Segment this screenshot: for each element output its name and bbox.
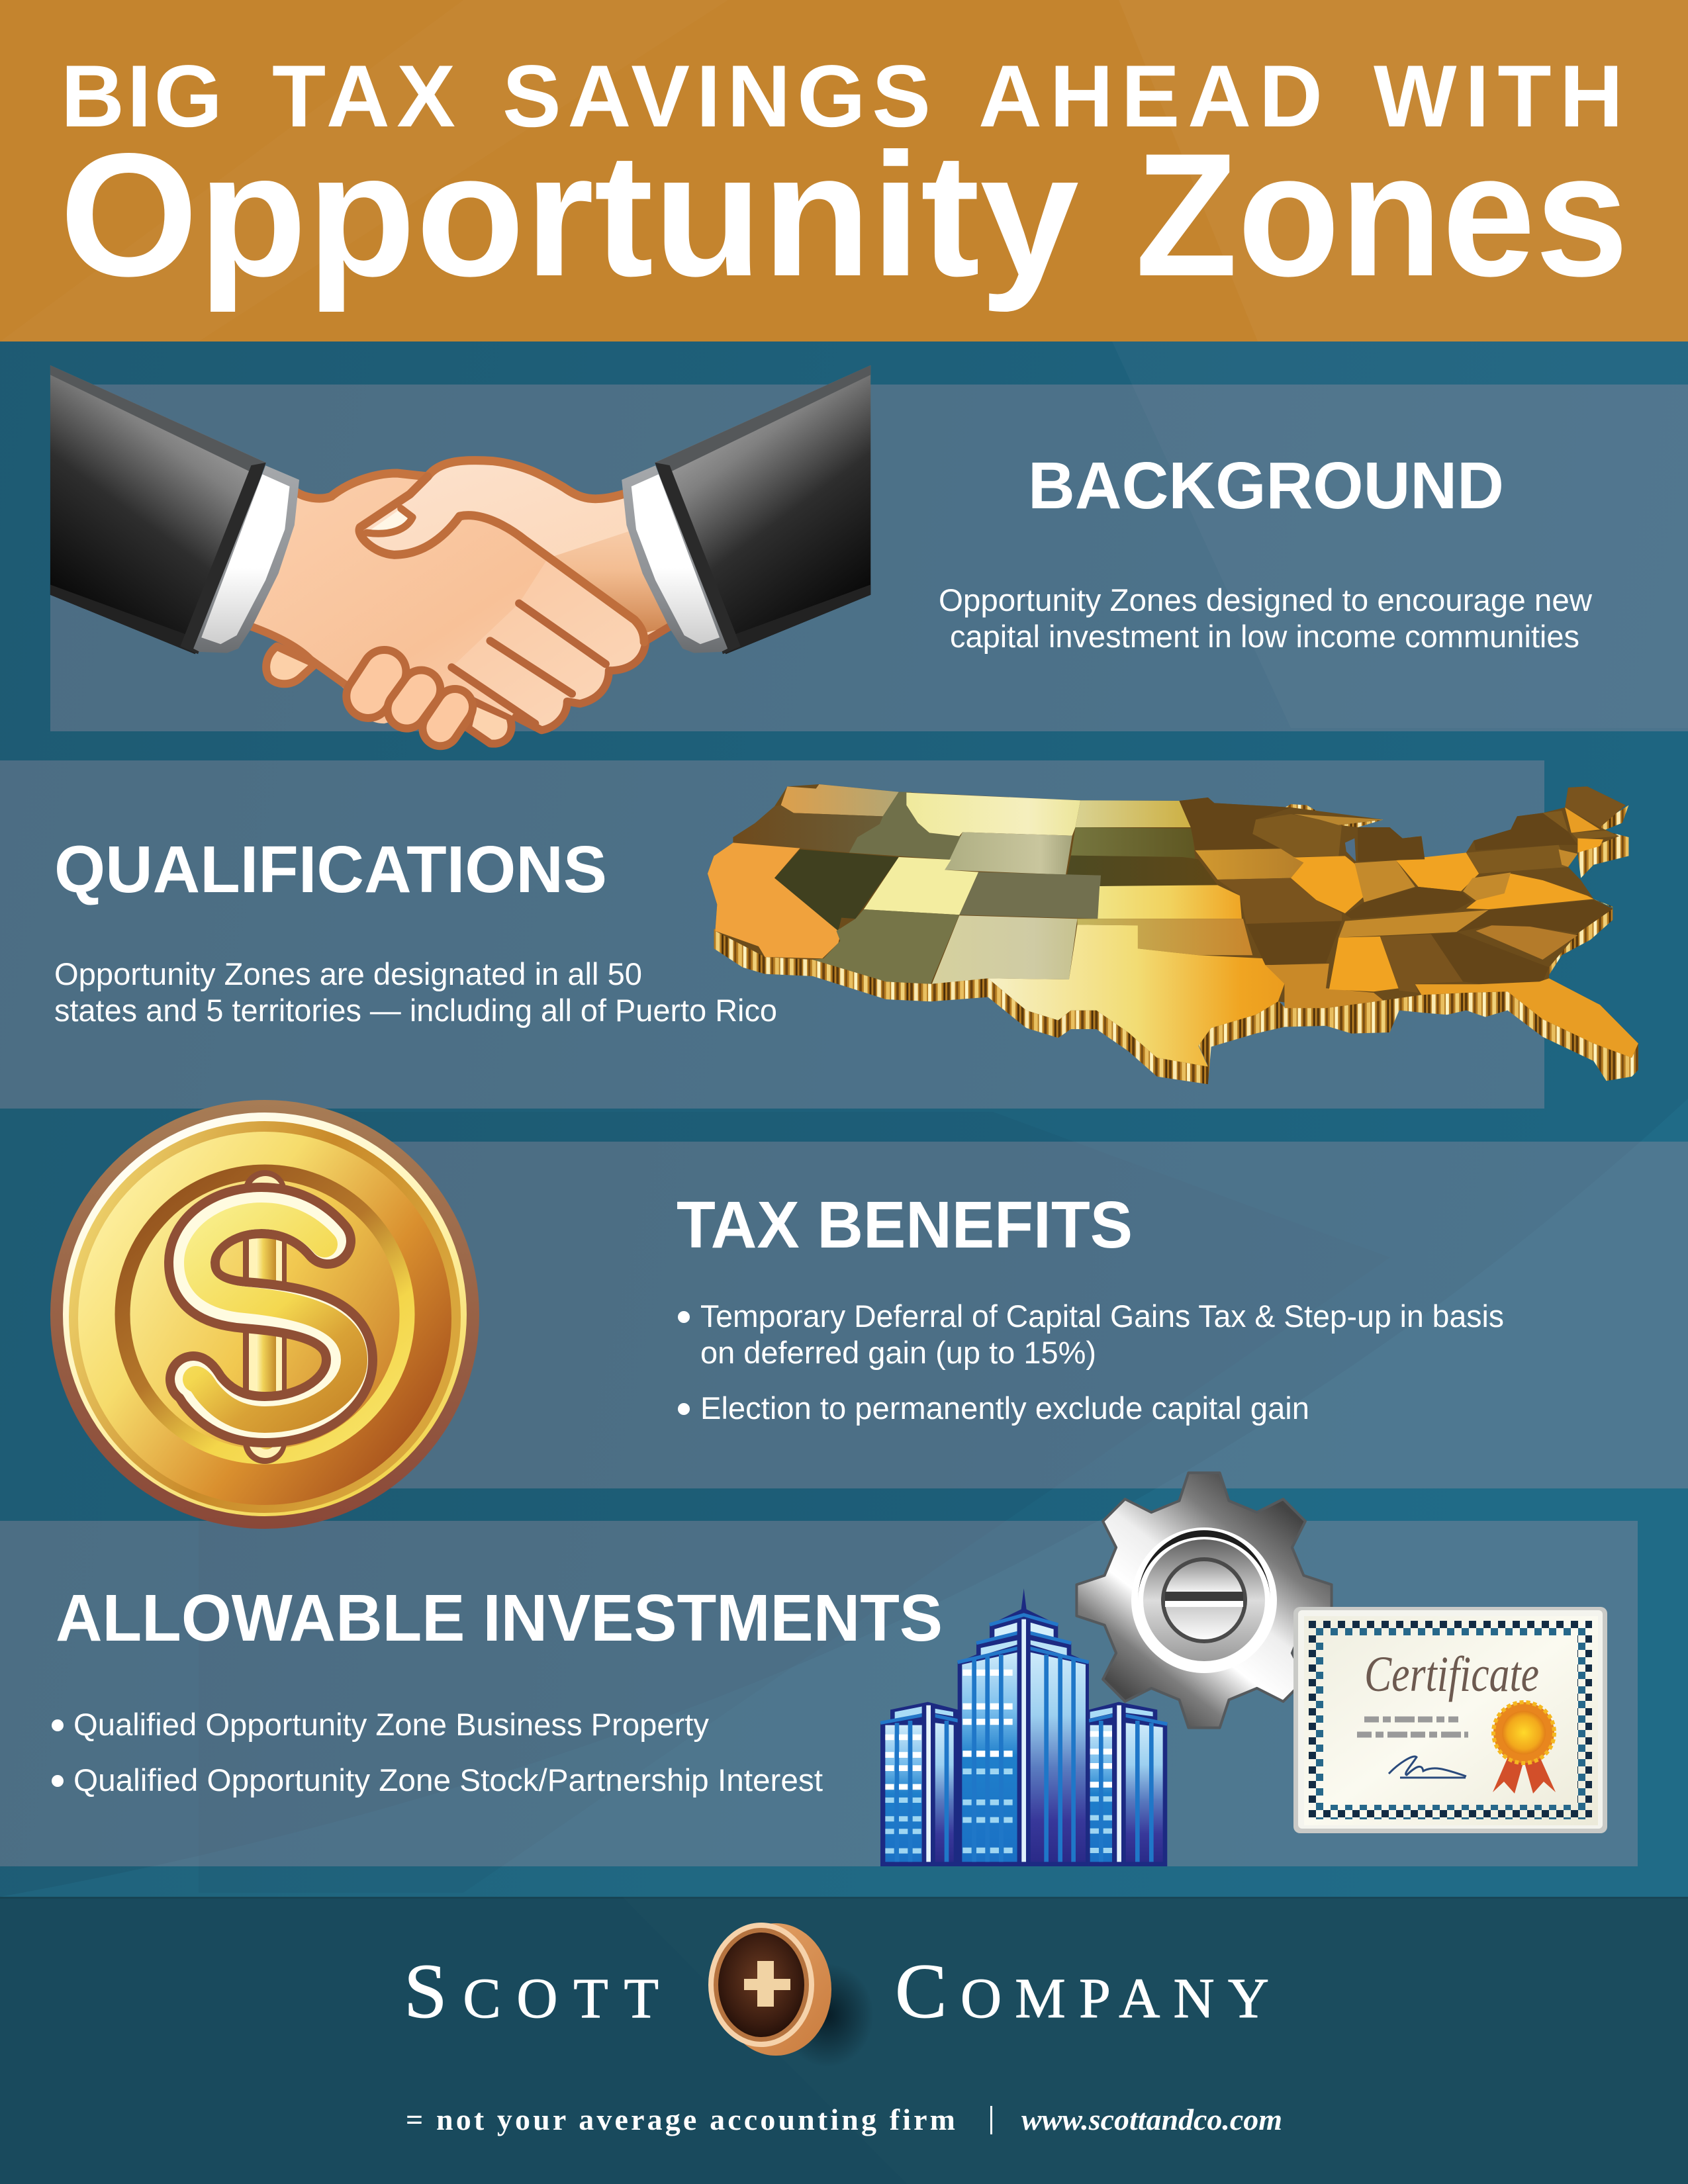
map base silhouette [708, 784, 1638, 1067]
text: background description: capital investment in low income communities [950, 619, 1579, 654]
title line one: WITH [1374, 48, 1623, 146]
footer band [0, 1897, 1688, 2184]
text: qualifications description: states and 5 territories — including all of Puerto Rico [54, 993, 777, 1028]
heading: tax benefits: TAX BENEFITS [677, 1188, 1133, 1262]
map extruded edge [714, 804, 1638, 1084]
bullet: exclusion: Election to permanently exclude capital gain [700, 1390, 1309, 1426]
title line one: AHEAD [978, 48, 1323, 146]
certificate title: Certificate [1364, 1647, 1539, 1702]
icon: silver gear [1076, 1473, 1332, 1728]
hand silhouette [251, 461, 670, 730]
thumb and index lines [359, 477, 644, 642]
bullet: deferral [678, 1298, 1504, 1370]
text: background description [939, 582, 1593, 654]
icon: certificate [1293, 1607, 1607, 1833]
panel: allowable investments [0, 1521, 1638, 1866]
title line one [61, 48, 1623, 146]
upper right hand [359, 461, 635, 558]
text: qualifications description: Opportunity Zones are designated in all 50 [54, 956, 642, 991]
logo wordmark left: S COTT [404, 1948, 659, 2034]
fingers [368, 672, 385, 696]
dollar sign S [192, 1210, 354, 1420]
main tower [958, 1588, 1089, 1866]
title line one: TAX [272, 48, 455, 146]
icon: office buildings [880, 1588, 1167, 1866]
hand outline [296, 461, 624, 499]
bullet: business property: Qualified Opportunity Zone Business Property [73, 1707, 710, 1742]
tagline: = not your average accounting firm [406, 2103, 955, 2136]
title line two: Zones [1135, 117, 1628, 313]
dollar sign bar [243, 1170, 287, 1464]
logo coin [708, 1923, 874, 2067]
finger lines [519, 604, 606, 664]
hand drawing [193, 461, 727, 744]
icon: gold dollar coin [50, 1100, 479, 1529]
thumbnail [367, 508, 412, 533]
fingers band [451, 558, 644, 730]
title line two: Opportunity [60, 117, 1080, 314]
panel: tax benefits [265, 1142, 1688, 1488]
header banner [0, 0, 1688, 341]
right forearm [548, 494, 670, 633]
title line one: BIG [61, 48, 222, 146]
left cuff [193, 465, 299, 653]
title line one: SAVINGS [502, 48, 931, 146]
right sleeve [655, 365, 870, 654]
right building [1089, 1702, 1167, 1866]
map states [708, 784, 1638, 1067]
text: qualifications description [54, 956, 777, 1028]
small finger behind [266, 647, 315, 684]
bullet: deferral: Temporary Deferral of Capital Gains Tax & Step-up in basis [700, 1298, 1504, 1334]
bullet: stock and partnership interest: Qualified Opportunity Zone Stock/Partnership Interest [73, 1762, 823, 1797]
text: background description: Opportunity Zones designed to encourage new [939, 582, 1593, 617]
panel: qualifications [0, 760, 1544, 1109]
icon: handshake [50, 365, 870, 744]
website: www.scottandco.com [1021, 2103, 1282, 2136]
left building [880, 1702, 958, 1866]
left sleeve [50, 365, 266, 654]
blurred certificate text lines [1357, 1719, 1468, 1735]
signature [1389, 1756, 1466, 1778]
checkered border [1309, 1621, 1592, 1819]
icon: gold US map [708, 784, 1638, 1084]
title line two [60, 117, 1628, 314]
panel: background [50, 385, 1688, 731]
heading: background: BACKGROUND [1028, 449, 1504, 523]
ring finger behind [468, 702, 512, 744]
right cuff [622, 465, 727, 653]
heading: allowable investments: ALLOWABLE INVESTMENTS [56, 1581, 943, 1655]
heading: qualifications: QUALIFICATIONS [54, 833, 607, 907]
logo wordmark right: COMPANY [895, 1948, 1269, 2034]
bullet: deferral: on deferred gain (up to 15%) [700, 1335, 1096, 1370]
award seal [1493, 1702, 1556, 1794]
